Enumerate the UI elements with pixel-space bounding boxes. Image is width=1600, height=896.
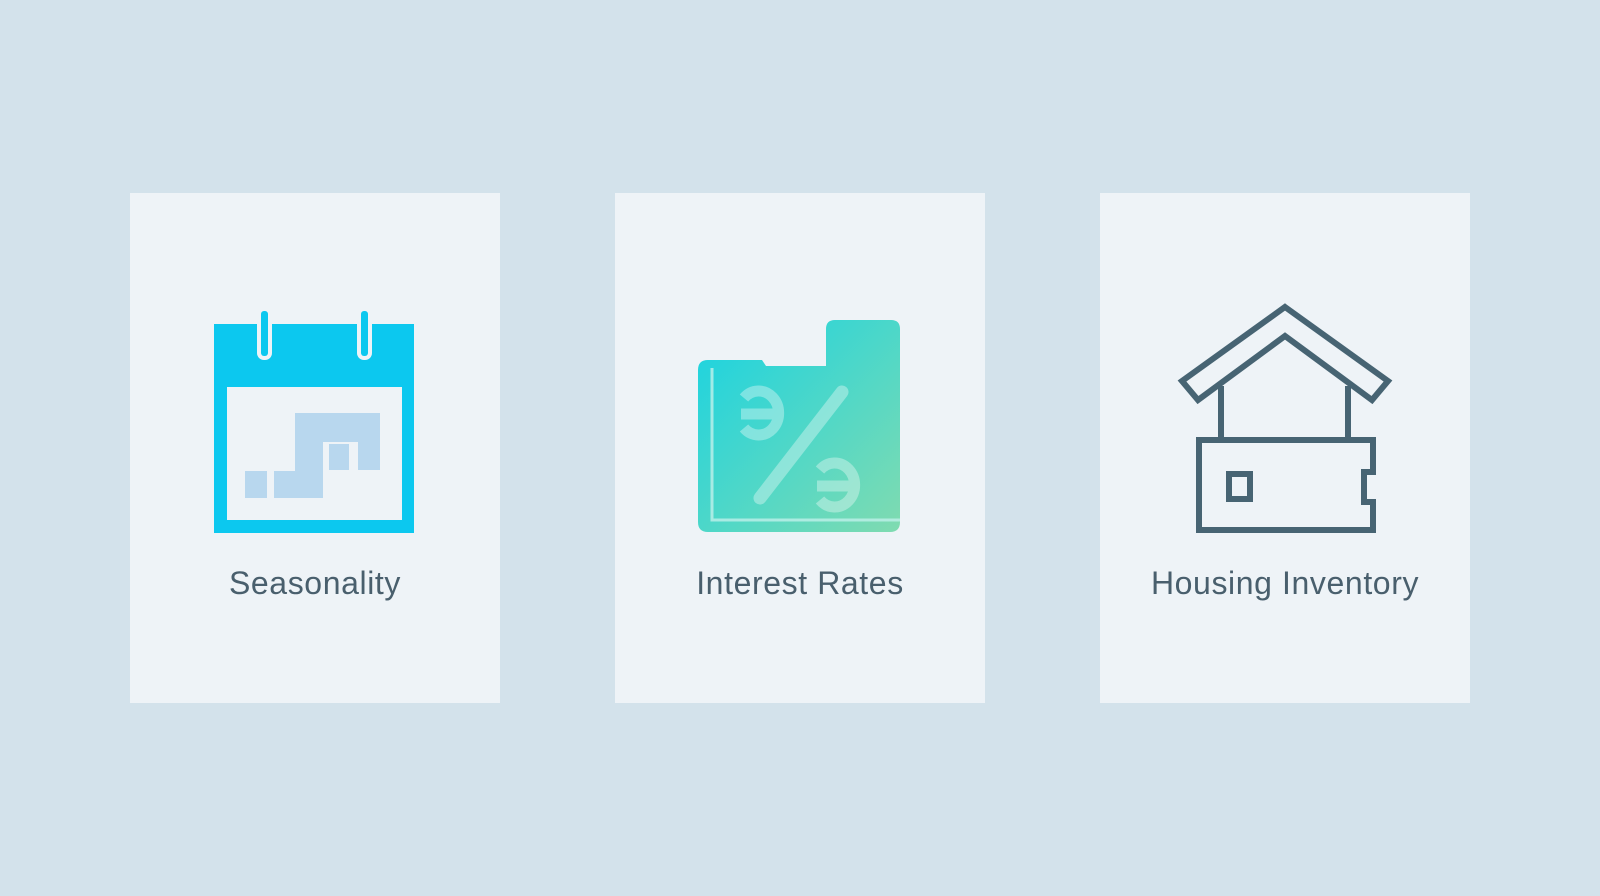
label: housing inventory: Housing Inventory: [1151, 565, 1419, 601]
icon: percent folder: [698, 320, 900, 532]
label: interest rates: Interest Rates: [696, 565, 904, 601]
panel: housing inventory: [1100, 193, 1470, 703]
panel: seasonality: [130, 193, 500, 703]
icon: house: [1182, 307, 1388, 530]
panel: interest rates: [615, 193, 985, 703]
icon: calendar: [214, 307, 414, 533]
label: seasonality: Seasonality: [229, 565, 401, 601]
